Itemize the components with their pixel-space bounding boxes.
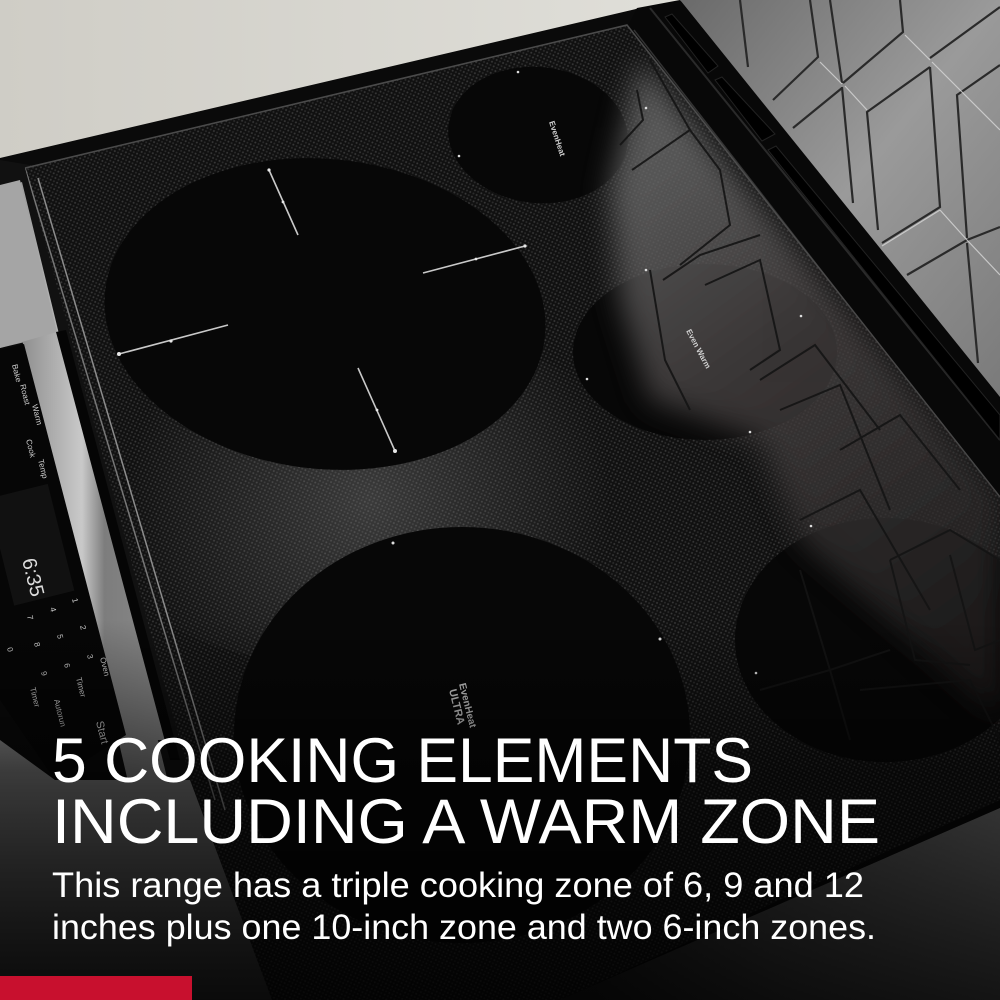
heading: INCLUDING A WARM ZONE — [52, 787, 880, 857]
mesh glow — [176, 388, 564, 650]
control panel labels: Roast — [18, 383, 32, 407]
control panel labels: 8 — [32, 641, 42, 648]
red accent bar — [0, 976, 192, 1000]
zone labels: EvenHeat — [547, 120, 567, 158]
left stainless frame — [0, 160, 220, 790]
zone labels — [446, 120, 712, 730]
zone: right element — [735, 518, 1000, 762]
vent slots — [665, 14, 1000, 440]
tile reflection on glass — [610, 60, 1000, 740]
backsplash tile — [680, 0, 1000, 400]
zone alignment dots — [392, 71, 812, 674]
marker: bottom — [358, 368, 397, 453]
control panel labels: Temp — [36, 458, 50, 480]
control panel labels: Timer — [28, 686, 42, 708]
countertop — [0, 0, 690, 158]
large element ring marks — [117, 168, 527, 453]
lower foreground steel — [0, 740, 1000, 1000]
control panel labels: 5 — [55, 633, 65, 640]
zone: large triple element — [89, 137, 561, 491]
black rear trim with vent slots — [627, 0, 1000, 505]
control panel labels: Cook — [24, 438, 38, 460]
control panel labels: Warm — [30, 403, 44, 426]
zone: warm zone — [573, 264, 837, 440]
description: This range has a triple cooking zone of 6, 9 and 12 — [52, 866, 864, 905]
bottom dark gradient — [0, 620, 1000, 1000]
zone labels: Even Warm — [684, 328, 712, 370]
zone labels: EvenHeat — [456, 682, 478, 730]
zone: rear small element — [441, 58, 635, 212]
tile highlight lines — [820, 35, 1000, 275]
control panel labels: 2 — [78, 624, 88, 631]
tile groove lines — [740, 0, 1000, 363]
control panel labels: 4 — [48, 606, 58, 613]
reflected tile chevrons — [620, 60, 1000, 740]
control panel labels: 7 — [25, 614, 35, 621]
control panel labels: Autorun — [52, 698, 68, 728]
control panel labels: 9 — [39, 670, 49, 677]
zone: front large element — [234, 527, 690, 943]
control panel labels: 0 — [5, 646, 15, 653]
oven clock: 6:35 — [17, 556, 48, 599]
control panel labels: 3 — [85, 653, 95, 660]
zone labels: ULTRA — [446, 688, 467, 726]
marker: right — [423, 244, 527, 273]
control panel labels: 6 — [62, 662, 72, 669]
control panel labels: Timer — [74, 676, 88, 698]
marker: left — [117, 325, 228, 356]
oven control panel — [0, 344, 126, 780]
control panel labels: Oven — [98, 656, 111, 677]
control panel labels — [5, 363, 111, 745]
keypad digits: 1 — [70, 597, 80, 604]
description: inches plus one 10-inch zone and two 6-inch zones. — [52, 908, 876, 947]
description — [52, 866, 876, 947]
marker: top — [267, 168, 298, 235]
control panel labels: Bake — [10, 363, 23, 384]
heading — [52, 726, 880, 857]
control panel labels: Start — [93, 720, 110, 745]
left glass edge — [25, 168, 215, 800]
heading: 5 COOKING ELEMENTS — [52, 726, 753, 796]
